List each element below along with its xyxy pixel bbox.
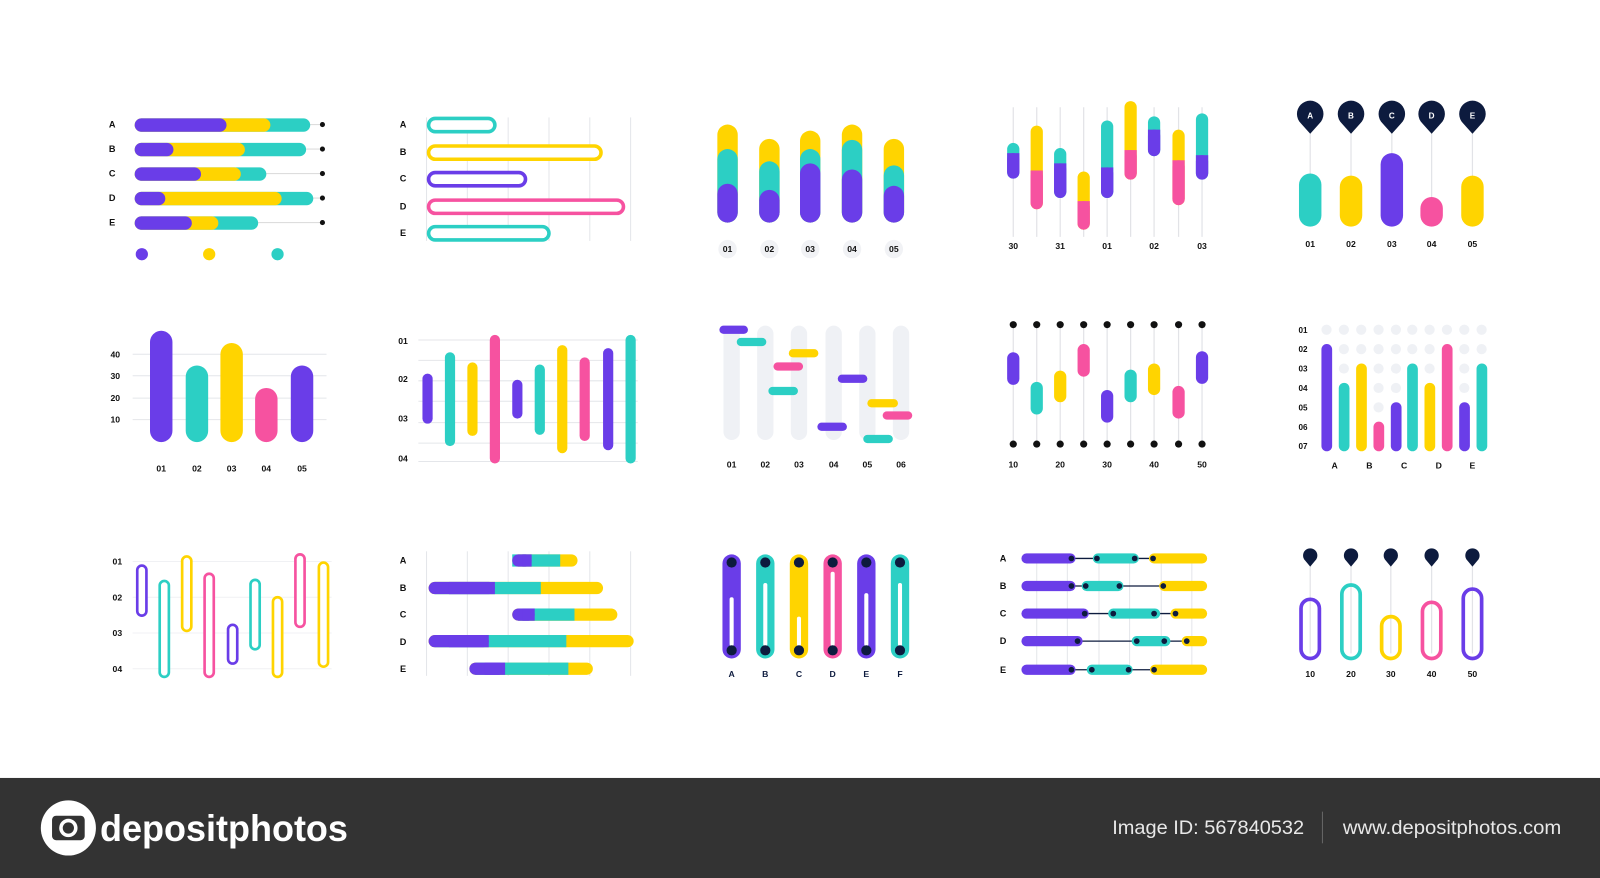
chart 9: dot range chart: 20 — [1055, 460, 1065, 470]
chart 10: dot grid bar chart: 04 — [1299, 384, 1308, 393]
chart 6: vertical bar chart: 30 — [110, 371, 120, 381]
chart 3: stacked vertical pills — [717, 125, 904, 258]
chart 10: dot grid bar chart — [1299, 325, 1487, 471]
chart 8: gantt: 06 — [896, 460, 906, 470]
chart 10: dot grid bar chart: A — [1332, 461, 1339, 471]
chart 10: dot grid bar chart: E — [1470, 461, 1476, 471]
chart 1: stacked horizontal bars: C — [109, 169, 116, 179]
chart 13: thermometer pills: B — [762, 669, 768, 679]
chart 7: floating thin bars: 02 — [398, 374, 408, 384]
chart 10: dot grid bar chart: D — [1436, 461, 1442, 471]
chart 5: pins with bars: 05 — [1468, 239, 1477, 249]
chart 1: stacked horizontal bars — [109, 118, 325, 260]
chart 8: gantt: 01 — [727, 460, 737, 470]
chart 12: floating stacked horizontal bars: B — [400, 583, 407, 593]
chart 2: outlined horizontal pills: E — [400, 228, 406, 238]
chart 5: pins with bars — [1297, 101, 1486, 249]
legend — [136, 248, 284, 260]
chart 1: stacked horizontal bars: E — [109, 218, 115, 228]
chart 7: floating thin bars — [398, 335, 638, 464]
footer bar — [0, 778, 1600, 878]
chart 14: timeline segments: E — [1000, 665, 1006, 675]
chart 15: pins with outlined pills — [1301, 548, 1482, 679]
chart 8: gantt — [719, 326, 912, 470]
chart 12: floating stacked horizontal bars: D — [400, 637, 407, 647]
chart 5: pins with bars: D — [1429, 111, 1435, 120]
chart 13: thermometer pills: F — [897, 669, 903, 679]
chart 14: timeline segments — [1000, 553, 1207, 675]
chart 11: outlined floating pills: 01 — [113, 557, 122, 567]
chart 4: candle bars — [1007, 101, 1208, 251]
chart 6: vertical bar chart: 04 — [262, 464, 271, 474]
chart 5: pins with bars: 02 — [1346, 239, 1356, 249]
chart 11: outlined floating pills — [113, 554, 332, 677]
chart 4: candle bars: 31 — [1055, 241, 1065, 251]
chart 10: dot grid bar chart: 01 — [1299, 326, 1308, 335]
chart 4: candle bars: 30 — [1008, 241, 1018, 251]
chart 14: timeline segments: D — [1000, 636, 1007, 646]
chart 14: timeline segments: A — [1000, 554, 1007, 564]
chart 12: floating stacked horizontal bars — [400, 551, 634, 676]
chart 2: outlined horizontal pills: A — [400, 120, 407, 130]
chart 6: vertical bar chart: 03 — [227, 464, 237, 474]
chart 12: floating stacked horizontal bars: C — [400, 610, 407, 620]
chart 2: outlined horizontal pills — [400, 117, 631, 241]
chart 8: gantt: 03 — [794, 460, 804, 470]
chart 5: pins with bars: E — [1470, 111, 1476, 120]
chart 15: pins with outlined pills: 40 — [1427, 669, 1437, 679]
chart 2: outlined horizontal pills: C — [400, 174, 407, 184]
chart 10: dot grid bar chart: 03 — [1299, 365, 1308, 374]
icon: camera logo — [41, 800, 96, 856]
chart 10: dot grid bar chart: 05 — [1299, 403, 1308, 412]
chart 2: outlined horizontal pills: D — [400, 201, 407, 211]
chart 10: dot grid bar chart: 07 — [1299, 442, 1308, 451]
chart 5: pins with bars: C — [1389, 111, 1395, 120]
chart 15: pins with outlined pills: 50 — [1468, 669, 1477, 679]
chart 8: gantt: 05 — [863, 460, 872, 470]
chart 9: dot range chart: 50 — [1197, 460, 1207, 470]
chart 6: vertical bar chart: 10 — [110, 415, 120, 425]
chart 10: dot grid bar chart: C — [1401, 461, 1408, 471]
chart 7: floating thin bars: 04 — [398, 453, 408, 463]
chart 9: dot range chart: 10 — [1008, 460, 1018, 470]
chart 14: timeline segments: B — [1000, 581, 1007, 591]
chart 9: dot range chart: 30 — [1102, 460, 1112, 470]
chart 12: floating stacked horizontal bars: E — [400, 664, 406, 674]
chart 1: stacked horizontal bars: B — [109, 144, 116, 154]
chart 9: dot range chart — [1007, 321, 1208, 470]
chart 11: outlined floating pills: 02 — [113, 592, 122, 602]
chart 3: stacked vertical pills: 04 — [847, 244, 857, 254]
chart 6: vertical bar chart: 01 — [156, 464, 166, 474]
chart 4: candle bars: 02 — [1149, 241, 1159, 251]
chart 2: outlined horizontal pills: B — [400, 147, 407, 157]
chart 7: floating thin bars: 03 — [398, 414, 408, 424]
chart 10: dot grid bar chart: 06 — [1299, 423, 1308, 432]
chart 1: stacked horizontal bars: D — [109, 193, 116, 203]
chart 3: stacked vertical pills: 03 — [805, 244, 815, 254]
chart 4: candle bars: 01 — [1102, 241, 1112, 251]
chart 6: vertical bar chart: 05 — [297, 464, 307, 474]
chart 12: floating stacked horizontal bars: A — [400, 556, 407, 566]
chart 15: pins with outlined pills: 20 — [1346, 669, 1356, 679]
chart 3: stacked vertical pills: 01 — [723, 244, 733, 254]
chart 13: thermometer pills: C — [796, 669, 803, 679]
chart 5: pins with bars: 04 — [1427, 239, 1437, 249]
chart 3: stacked vertical pills: 02 — [765, 244, 774, 254]
chart 5: pins with bars: A — [1307, 111, 1313, 120]
chart 5: pins with bars: 01 — [1305, 239, 1315, 249]
chart 7: floating thin bars: 01 — [398, 336, 408, 346]
chart 6: vertical bar chart: 40 — [110, 349, 120, 359]
chart 11: outlined floating pills: 03 — [113, 628, 122, 638]
chart 13: thermometer pills: D — [830, 669, 836, 679]
image id: Image ID: 567840532 — [1112, 817, 1304, 839]
chart 8: gantt: 02 — [760, 460, 770, 470]
chart 4: candle bars: 03 — [1197, 241, 1207, 251]
chart 13: thermometer pills: A — [729, 669, 735, 679]
chart 13: thermometer pills — [722, 554, 909, 679]
chart 10: dot grid bar chart: B — [1366, 461, 1373, 471]
chart 10: dot grid bar chart: 02 — [1299, 345, 1308, 354]
chart 5: pins with bars: 03 — [1387, 239, 1397, 249]
website: www.depositphotos.com — [1342, 817, 1561, 839]
chart 1: stacked horizontal bars: A — [109, 120, 116, 130]
chart 13: thermometer pills: E — [863, 669, 869, 679]
chart 15: pins with outlined pills: 30 — [1386, 669, 1396, 679]
chart 6: vertical bar chart — [110, 331, 327, 474]
chart 6: vertical bar chart: 02 — [192, 464, 202, 474]
chart 9: dot range chart: 40 — [1149, 460, 1159, 470]
chart 8: gantt: 04 — [829, 460, 839, 470]
chart 15: pins with outlined pills: 10 — [1305, 669, 1315, 679]
chart 6: vertical bar chart: 20 — [110, 393, 120, 403]
chart 14: timeline segments: C — [1000, 609, 1007, 619]
chart 3: stacked vertical pills: 05 — [889, 244, 899, 254]
chart 5: pins with bars: B — [1348, 111, 1354, 120]
chart 11: outlined floating pills: 04 — [113, 664, 122, 674]
logo text: depositphotos — [100, 808, 348, 849]
